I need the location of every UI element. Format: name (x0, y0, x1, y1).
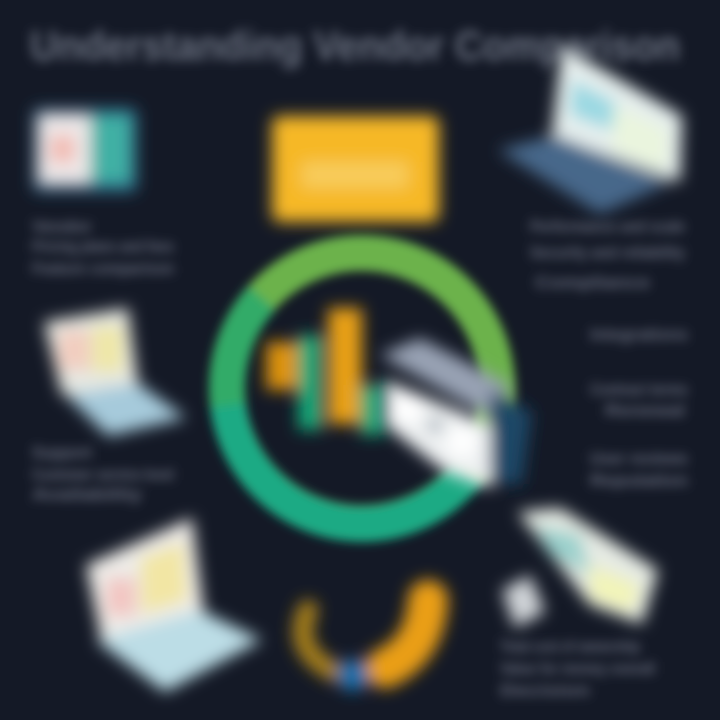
icon: central laptop (380, 338, 532, 488)
text block: left lower: Support (32, 443, 92, 462)
text block: lower right: Total cost of ownership (500, 637, 640, 656)
text block: right item three: User reviews (590, 449, 688, 468)
chart: bars (266, 308, 384, 435)
text block: right item two: Renewal (605, 401, 685, 420)
text block: right upper: Security and reliability (530, 243, 685, 262)
text block: right upper (530, 217, 685, 292)
text block: right item two: Contract terms (590, 380, 688, 399)
text block: right item three (590, 449, 688, 490)
text block: lower right (500, 637, 655, 700)
text block: right upper: Performance and scale (530, 217, 685, 236)
text block: right item two (590, 380, 688, 420)
icon: lower-right device (502, 508, 658, 628)
text block: right upper: Compliance (535, 273, 650, 292)
icon: bottom-left laptop (86, 518, 262, 692)
chart: ring (227, 253, 497, 524)
text block: left lower: Customer service level (32, 465, 174, 484)
chart: bottom arcs (303, 600, 428, 691)
text block: left upper: Pricing plans and fees (32, 237, 174, 256)
callout: yellow box (272, 116, 439, 222)
text block: left lower (32, 443, 174, 504)
icon: top-left card (33, 108, 137, 192)
text block: left upper: Vendor (32, 217, 92, 236)
text block: lower right: Value for money overall (500, 659, 655, 678)
text block: left upper: Feature comparison (32, 259, 174, 278)
title: Understanding Vendor Comparison (30, 22, 680, 69)
icon: left laptop (44, 308, 186, 436)
text block: right item one: Integrations (590, 325, 688, 344)
text block: right item three: Reputation (590, 471, 688, 490)
text block: left lower: Availability (32, 485, 143, 504)
text block: lower right: Decision (500, 681, 590, 700)
text block: left upper (32, 217, 174, 278)
icon: top-right laptop (498, 46, 682, 214)
